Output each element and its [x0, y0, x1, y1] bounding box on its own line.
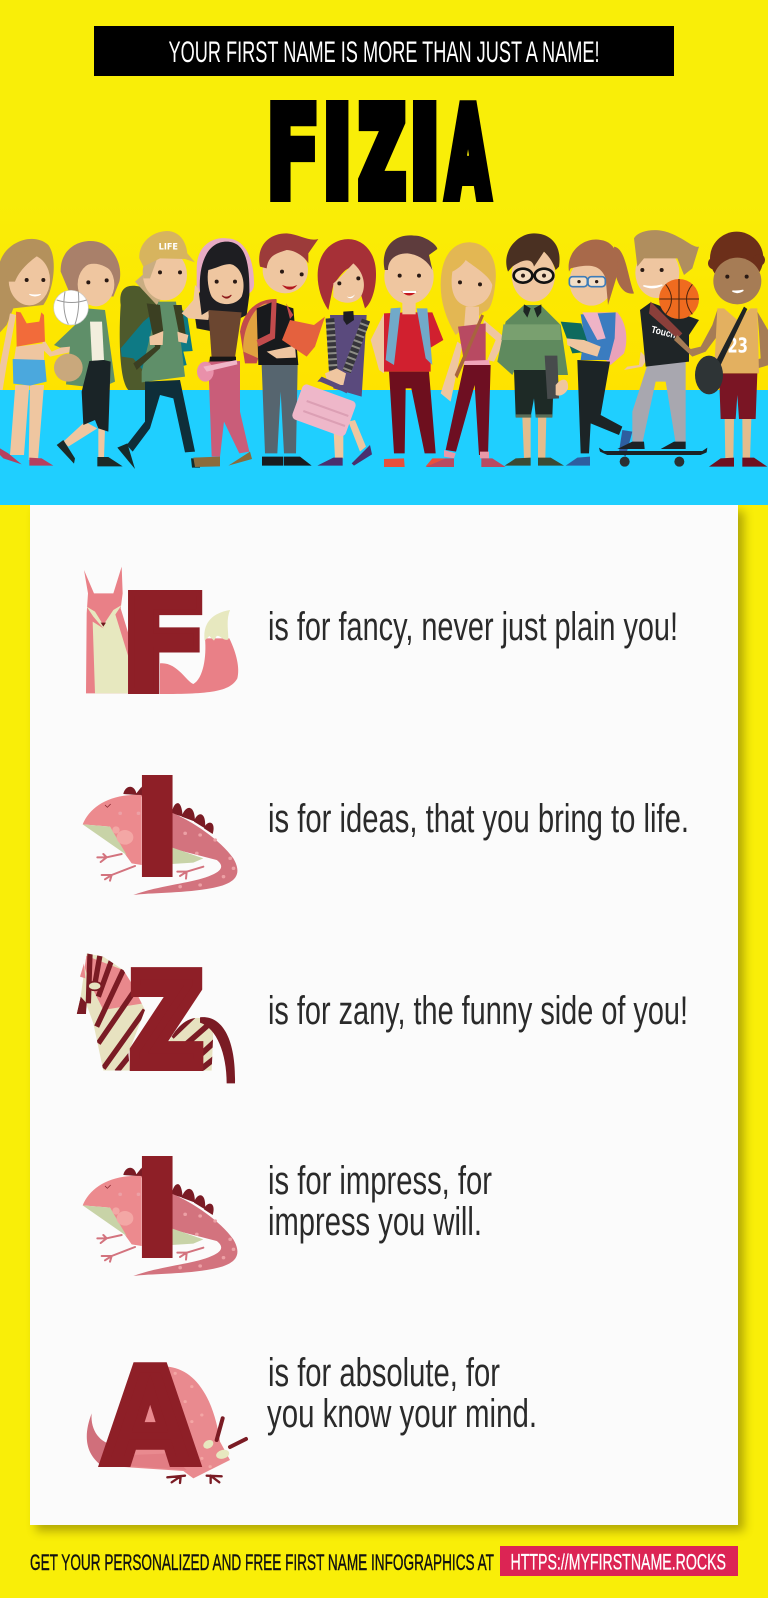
character: girl with pink suitcase	[291, 239, 376, 466]
header banner	[94, 26, 674, 76]
row 5 text: you know your mind.	[267, 1392, 537, 1436]
character: boy in red shirt	[371, 235, 454, 467]
character: boy in basketball jersey: 23	[727, 333, 748, 357]
icon: zebra	[73, 950, 235, 1083]
character: girl in orange top	[0, 239, 80, 466]
character: boy on skateboard with basketball	[599, 230, 707, 467]
icon: armadillo	[87, 1365, 246, 1483]
row 4 text: impress you will.	[268, 1200, 482, 1244]
title: name FIZIA: I	[321, 79, 354, 229]
character: boy reading red book	[240, 233, 325, 466]
row 3: letter Z illustration	[76, 954, 236, 1084]
character: girl in green jacket with volleyball	[54, 241, 123, 466]
row 2: letter I illustration	[83, 747, 237, 910]
character: boy with cap and backpack: LIFE	[159, 243, 178, 253]
button background	[500, 1546, 738, 1576]
character: boy in red shirt, left arm	[373, 320, 384, 340]
icon: iguana	[83, 1168, 237, 1276]
character: blonde girl holding hands	[426, 242, 506, 467]
icon: iguana	[83, 787, 237, 895]
footer call to action: GET YOUR PERSONALIZED AND FREE FIRST NAME INFOGRAPHICS AT	[30, 1550, 494, 1575]
character: boy in basketball jersey	[674, 232, 768, 467]
yellow hero backdrop	[0, 200, 768, 395]
banner background	[94, 26, 674, 76]
row 1: letter F illustration	[84, 566, 238, 723]
title: name FIZIA: A	[447, 84, 489, 225]
letter I: I	[127, 747, 188, 910]
character: boy with cap and backpack	[117, 231, 200, 469]
row 4 text	[268, 1159, 492, 1244]
row 4: letter I illustration	[83, 1128, 237, 1291]
letter F: F	[119, 566, 210, 723]
letter I: I	[127, 1128, 188, 1291]
illustration: group of students, left half	[0, 231, 384, 469]
row 5: letter A illustration	[87, 1342, 246, 1493]
letter Z: Z	[130, 948, 203, 1095]
white content panel	[30, 505, 738, 1525]
title: name FIZIA: Z	[359, 83, 405, 224]
blue floor band	[0, 390, 768, 505]
icon: fox	[84, 567, 238, 694]
row 5 text	[267, 1351, 537, 1436]
character: girl with blue glasses and tablet	[561, 240, 634, 466]
letter A: A	[104, 1342, 196, 1493]
title: name FIZIA	[265, 78, 489, 229]
title: name FIZIA: F	[265, 80, 321, 229]
row 5 text: is for absolute, for	[268, 1351, 500, 1395]
row 4 text: is for impress, for	[268, 1159, 492, 1203]
footer link button	[500, 1546, 738, 1576]
illustration: group of students, right half	[371, 230, 768, 467]
character: girl with headphones	[182, 238, 254, 467]
panel shadow	[36, 511, 744, 1531]
title: name FIZIA: I	[407, 78, 442, 229]
character: boy on skateboard with basketball: Touch	[650, 325, 677, 341]
character: boy with glasses	[497, 233, 568, 466]
